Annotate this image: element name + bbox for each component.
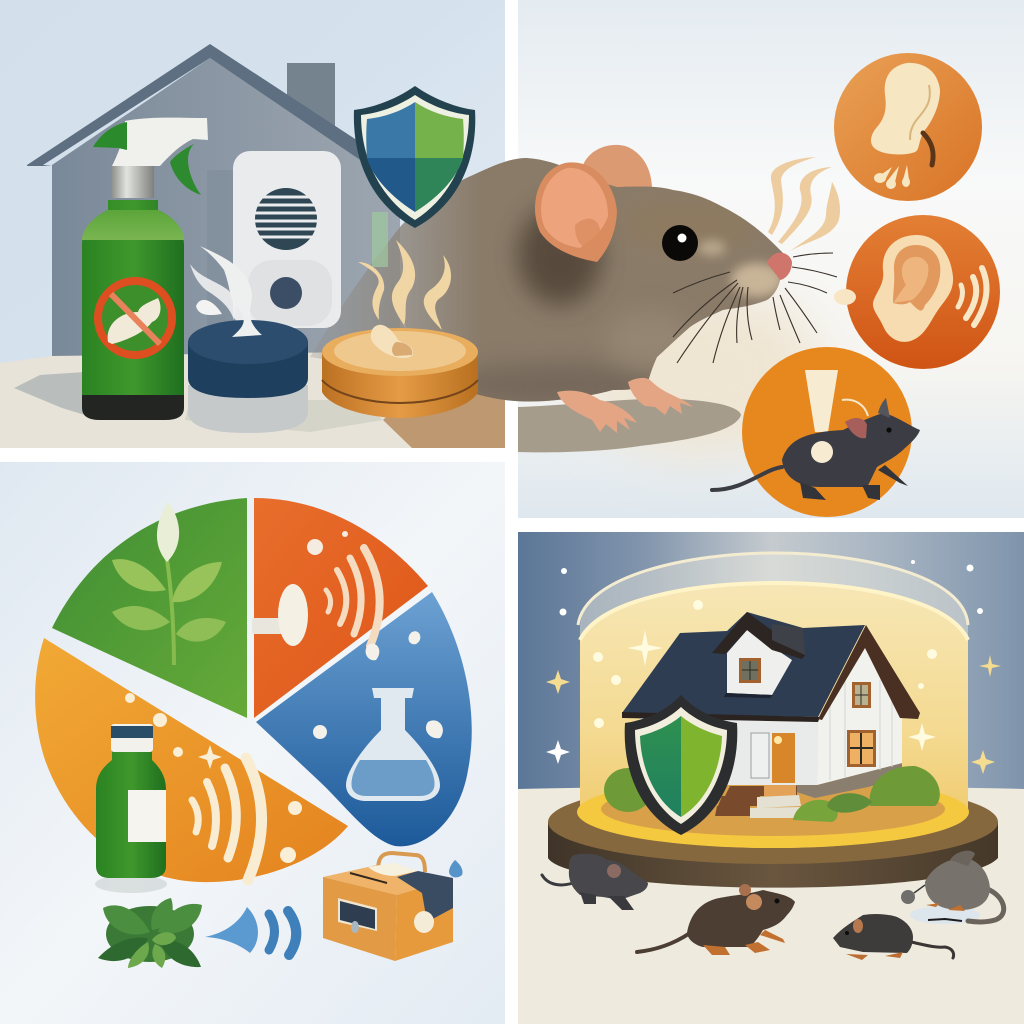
rat: centre [637,884,795,955]
black rat [712,398,920,500]
floor shadow [518,399,741,452]
paws [557,378,693,433]
whiskers [673,253,837,363]
icon: shield [354,86,475,228]
icon: blue sound cone [205,907,296,955]
icon: scent jar [188,246,308,433]
rat: right front [833,914,954,960]
eye [662,225,698,261]
steps [715,786,797,816]
green glow below shield [372,212,388,267]
glass dome [578,553,968,848]
icon: green shield [625,695,737,835]
sparkles [546,655,1001,774]
rat: right back [901,851,1004,924]
segment: orange products [35,638,348,882]
bushes [604,766,940,822]
icon: herb sprig [112,502,226,665]
segment: orange-red sound [254,498,428,718]
near ear [535,162,617,262]
island base [577,776,969,848]
segment: green herbal [52,498,247,718]
icon: no-rodent label [97,280,173,356]
icon: sound waves on orange [192,758,262,880]
icon: large brown rat [310,145,837,433]
icon: lab flask [313,631,443,801]
rat: left [542,854,648,910]
icon: scent wisps [768,157,840,251]
panel: home backdrop [0,0,505,448]
icon: alert badge with black rat [712,347,920,517]
icon: ultrasonic device [233,151,341,328]
floor surface [0,352,505,448]
body [310,158,792,402]
far ear [583,145,652,190]
panel: rat senses background [518,0,1024,518]
panel: home repellent products [82,86,478,433]
icon: ultrasonic emitter [252,531,380,646]
floor [518,787,1024,1024]
icon: mint leaves [98,898,202,968]
nose [767,253,792,280]
segment: blue chemical [256,592,472,846]
wooden platform [548,800,998,888]
icon: house [622,612,920,818]
icon: green spray bottle [82,118,208,420]
icon: amber dish with vapour [322,240,478,418]
icon: grey house silhouette [27,44,400,360]
panel: repellent categories pie [0,462,505,1024]
chart: segmented pie [35,498,472,882]
panel: protected house dome [518,532,1024,1024]
icon: orange box [323,853,463,961]
icon: small green bottle [95,724,167,893]
icon: smell badge [834,53,982,201]
icon: hearing badge [834,215,1000,369]
decorative sparkles [125,693,302,863]
fur shading [450,197,783,407]
